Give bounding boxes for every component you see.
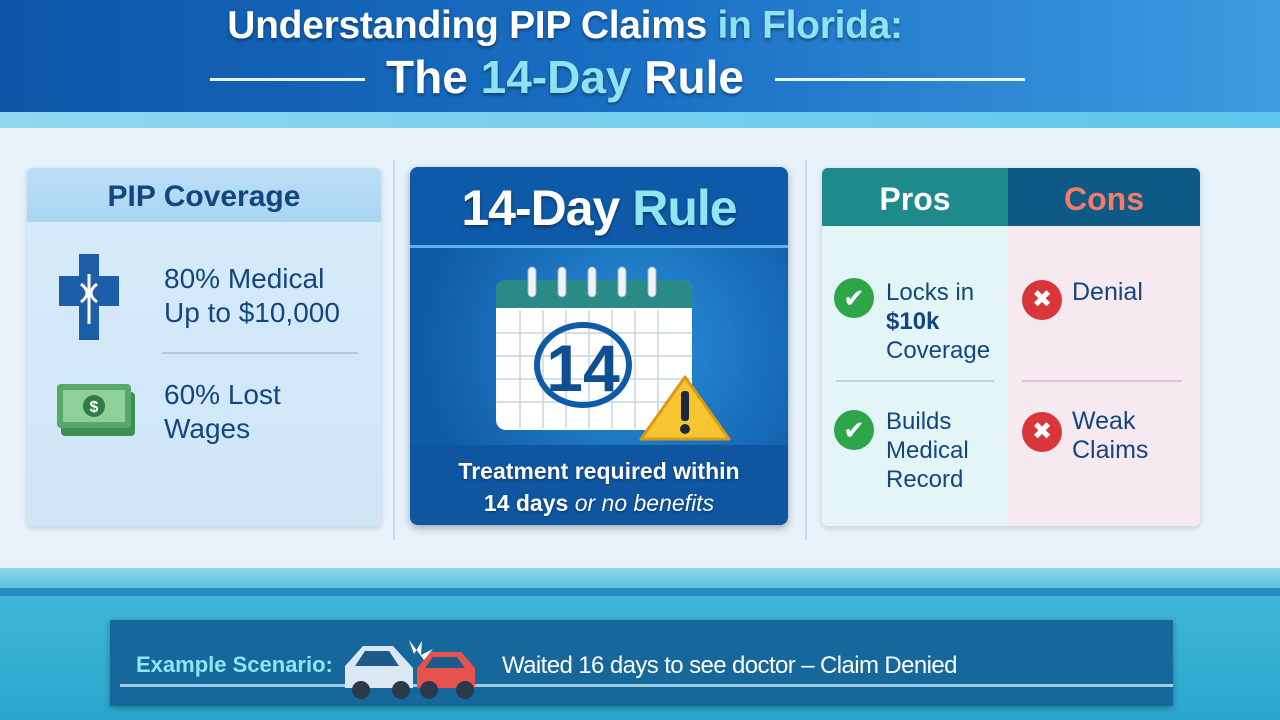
title <box>227 4 903 106</box>
panel: pros and cons: Builds <box>886 408 951 435</box>
text: 80% medical: 80% Medical <box>164 263 324 294</box>
panel: pros and cons: Locks in <box>886 279 974 306</box>
heading: PIP Coverage <box>27 168 381 222</box>
text: 60% lost wages <box>164 379 281 444</box>
footer band <box>0 568 1280 720</box>
scenario text: Waited 16 days to see doctor – Claim Denied <box>502 652 957 679</box>
heading: PIP Coverage: PIP Coverage <box>108 180 300 213</box>
pro 2 <box>834 410 874 450</box>
title: The 14-Day Rule <box>386 51 744 103</box>
panel: pros and cons <box>822 168 1200 526</box>
panel: pros and cons: Weak <box>1072 407 1135 435</box>
heading: Cons <box>1008 168 1200 226</box>
pro 1 <box>834 278 874 318</box>
panel: pros and cons: Record <box>886 466 963 493</box>
icon: medical cross <box>59 254 119 340</box>
panel: PIP coverage <box>27 168 381 526</box>
text: 80% medical: Up to $10,000 <box>164 297 340 328</box>
con 1: ✖ <box>1032 286 1052 313</box>
caption: Treatment required within <box>458 458 740 484</box>
example scenario banner <box>110 620 1173 706</box>
panel: pros and cons: Medical <box>886 437 969 464</box>
text: 60% lost wages: Wages <box>164 413 250 444</box>
pro 1: ✔ <box>843 283 865 313</box>
caption: 14 days or no benefits <box>484 490 714 516</box>
label: Example Scenario: Example Scenario: <box>136 652 333 677</box>
title: Understanding PIP Claims in Florida: <box>227 4 903 47</box>
panel: pros and cons: $10k <box>886 308 939 335</box>
heading: Pros <box>822 168 1008 226</box>
con 2: ✖ <box>1032 418 1052 445</box>
con 2 <box>1022 412 1062 452</box>
icon: money <box>57 384 135 436</box>
icon: calendar with warning: 14 <box>546 331 620 405</box>
header band <box>0 0 1280 118</box>
panel: pros and cons: Coverage <box>886 337 990 364</box>
panel: pros and cons: Denial <box>1072 278 1143 306</box>
heading: 14-Day Rule <box>410 167 788 245</box>
heading: 14-Day Rule: 14-Day Rule <box>461 180 737 236</box>
heading: Cons: Cons <box>1064 181 1144 217</box>
panel: 14-day rule <box>410 167 788 525</box>
text: 60% lost wages: 60% Lost <box>164 379 281 410</box>
icon: calendar with warning <box>496 266 730 440</box>
text: 80% medical <box>164 263 340 328</box>
icon: money: $ <box>90 399 99 416</box>
con 1 <box>1022 280 1062 320</box>
panel: pros and cons: Claims <box>1072 436 1148 464</box>
pro 2: ✔ <box>843 415 865 445</box>
caption <box>410 445 788 525</box>
icon: car crash <box>345 640 475 699</box>
heading: Pros: Pros <box>879 181 951 217</box>
